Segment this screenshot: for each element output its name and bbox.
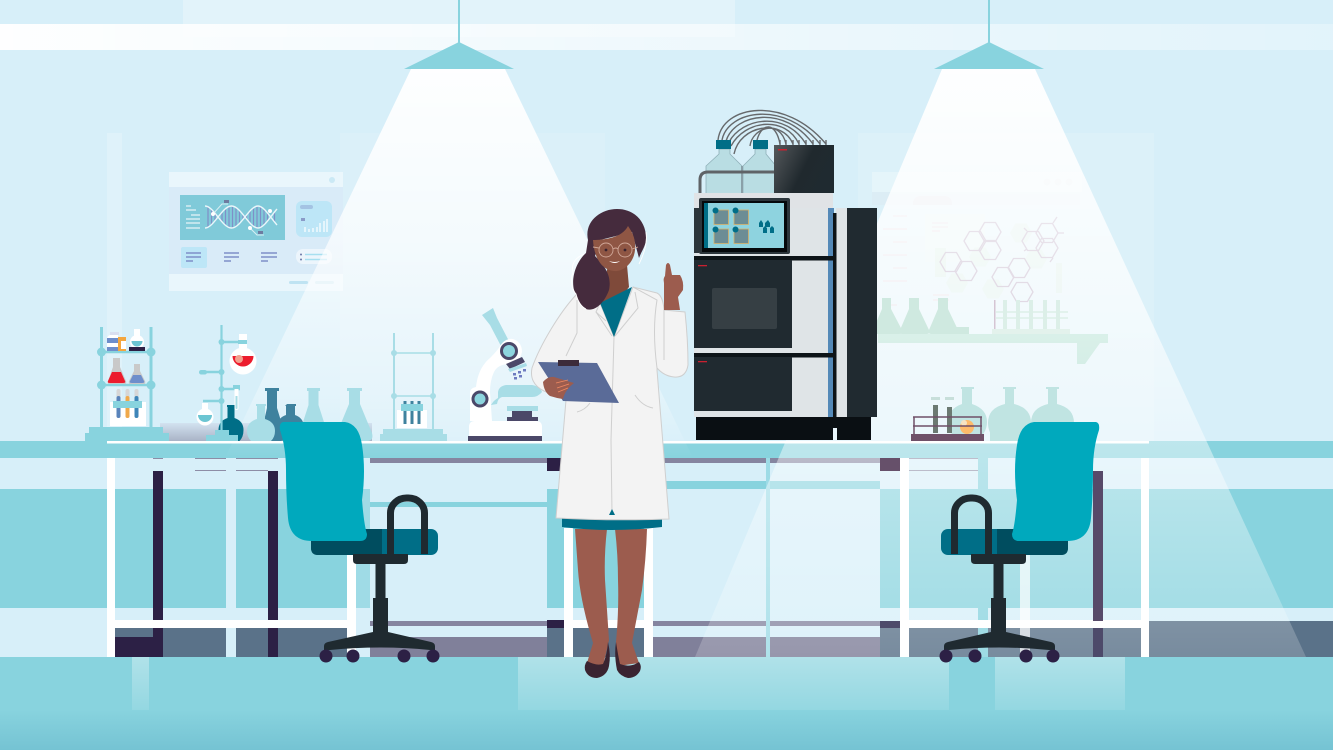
left office chair	[280, 422, 440, 662]
lab coat	[532, 287, 688, 520]
tubing	[718, 110, 826, 154]
wheels	[320, 650, 440, 662]
bar chart card	[296, 201, 332, 237]
right shelf with flasks (behind light)	[878, 334, 1108, 364]
small round flask	[196, 403, 214, 426]
lower wall teal	[0, 489, 1333, 608]
red conical flask	[108, 358, 126, 384]
DNA chart	[180, 195, 285, 240]
centre back panel of bench	[356, 458, 880, 657]
hanging test tube	[233, 385, 240, 410]
shelf flasks and test tubes	[872, 298, 1070, 334]
bottle and jar	[107, 332, 126, 351]
round dark flask	[218, 405, 244, 441]
right wall screen with molecules	[872, 172, 1082, 305]
small round flask	[129, 329, 145, 351]
rack with bottles and flasks	[85, 327, 169, 441]
rail	[700, 172, 775, 194]
column and base	[944, 554, 1055, 650]
modules	[694, 208, 836, 417]
touch display	[699, 198, 790, 254]
flask group on left bench	[218, 388, 372, 441]
ceiling lamp right	[934, 0, 1044, 69]
teal top	[600, 287, 632, 337]
left wall screen	[169, 172, 343, 291]
hair back and lock	[573, 209, 646, 310]
clipboard	[538, 360, 619, 403]
left lab table	[107, 458, 356, 657]
scientist	[532, 209, 688, 678]
left light cone	[225, 69, 693, 458]
skirt	[562, 516, 662, 530]
HPLC instrument	[694, 110, 877, 440]
raised hand	[664, 263, 683, 310]
test tubes box	[110, 391, 146, 426]
right bench flasks and tube rack	[911, 387, 1074, 441]
empty rack with test tubes	[380, 333, 447, 441]
left bench surface strip	[160, 423, 372, 441]
arm rest	[954, 498, 988, 554]
dark table parts over the light	[880, 458, 1103, 657]
backrest	[280, 422, 367, 541]
right column	[836, 208, 877, 417]
wheels	[940, 650, 1060, 662]
seat	[941, 529, 1068, 555]
red flask	[230, 334, 256, 374]
microscope	[468, 308, 542, 441]
right light cone	[695, 69, 1306, 657]
bench top surface	[0, 441, 1333, 458]
arm	[470, 339, 522, 421]
arm rest	[390, 498, 424, 554]
centre bench frame behind scientist	[547, 441, 653, 657]
seat	[311, 529, 438, 555]
right lab table	[880, 458, 1149, 657]
shoes	[585, 642, 641, 678]
hair outline curl	[572, 232, 646, 309]
base	[696, 417, 871, 440]
black box	[774, 145, 834, 193]
neck	[601, 265, 629, 307]
face	[593, 226, 638, 271]
legs	[575, 529, 647, 666]
blue conical flask	[129, 364, 145, 384]
holding hand	[543, 377, 574, 399]
floor	[0, 657, 1333, 750]
solvent bottles	[706, 140, 776, 194]
right office chair	[940, 422, 1099, 662]
light round flask	[247, 404, 275, 441]
light conical flask one	[299, 388, 328, 441]
ceiling lamp left	[404, 0, 514, 69]
column and base	[324, 554, 435, 650]
backrest	[1012, 422, 1099, 541]
small dark flask	[277, 404, 304, 441]
light conical flask two	[337, 388, 372, 441]
lower wall grey band right	[1149, 621, 1333, 657]
tall teal flask	[261, 388, 285, 441]
retort stand with red flask	[196, 325, 256, 441]
